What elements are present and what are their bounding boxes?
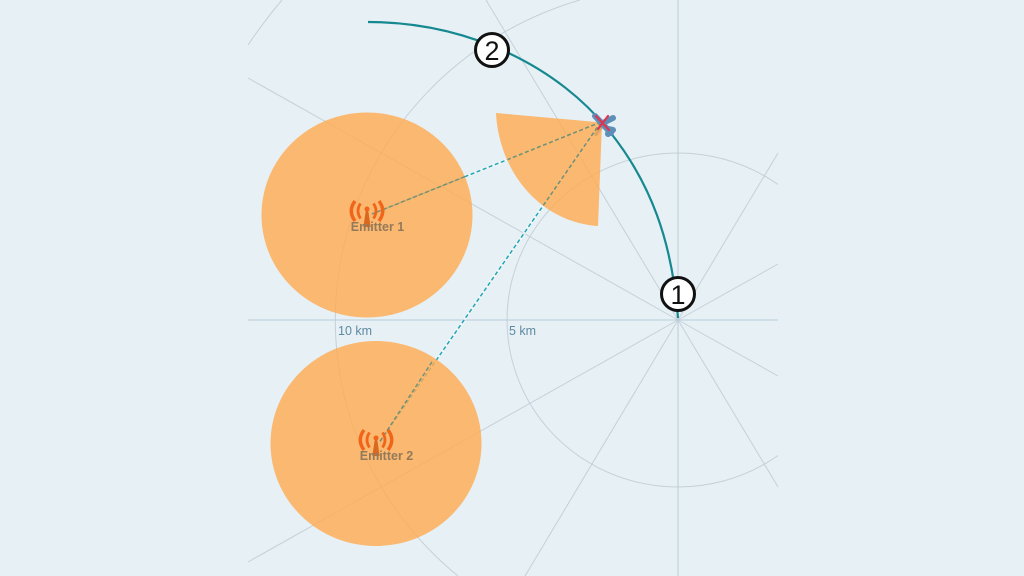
link segments seen through orange areas xyxy=(372,122,601,443)
icon: emitter 2 antenna xyxy=(360,430,392,455)
link: aircraft to emitter 1 xyxy=(372,122,601,214)
aircraft lower wing xyxy=(596,124,603,134)
waypoint marker 2 xyxy=(476,34,508,66)
waypoint marker 1 xyxy=(662,278,694,310)
label: 10 km: 10 km xyxy=(338,324,372,338)
waypoint marker 2: 2 xyxy=(484,36,500,66)
polar range grid xyxy=(248,0,778,576)
link: aircraft to emitter 2 xyxy=(379,122,601,443)
emitter 1 range circle xyxy=(262,112,472,318)
label: 5 km: 5 km xyxy=(509,324,536,338)
waypoint marker 1: 1 xyxy=(670,280,686,310)
flight path arc xyxy=(368,22,678,318)
icon: aircraft xyxy=(595,116,613,134)
label: emitter 1: Emitter 1 xyxy=(351,220,404,234)
label: emitter 2: Emitter 2 xyxy=(360,449,413,463)
emitter 2 range circle xyxy=(270,341,482,546)
icon: emitter 1 antenna xyxy=(351,201,383,226)
aircraft sensor sector xyxy=(496,113,602,226)
